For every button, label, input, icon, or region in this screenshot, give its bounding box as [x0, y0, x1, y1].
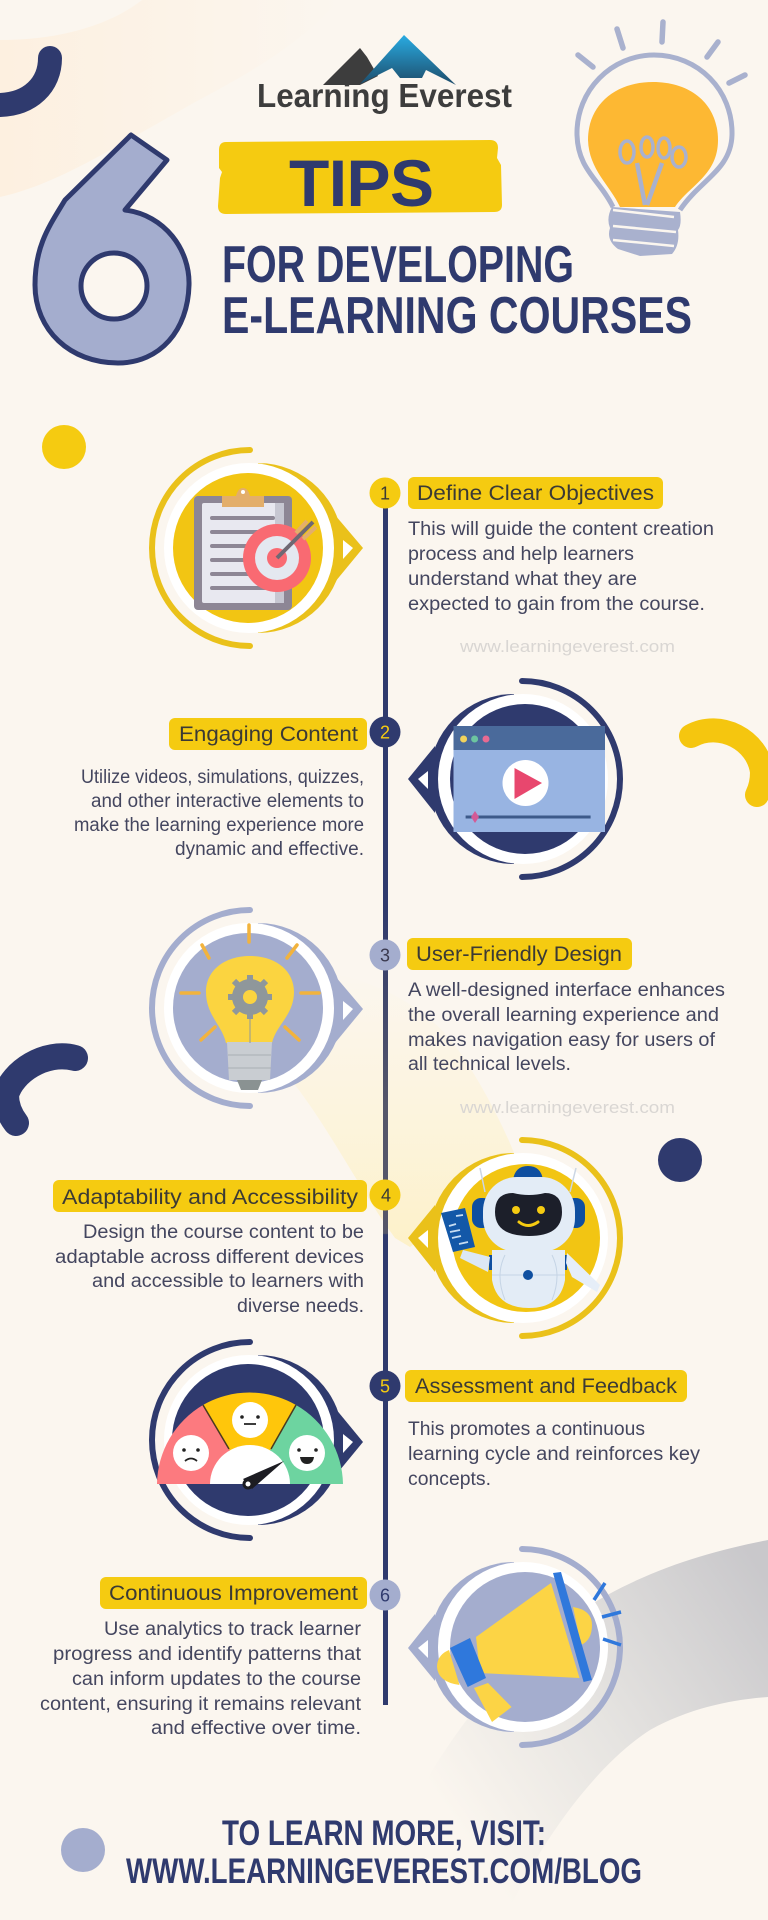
step number 5 — [370, 1370, 400, 1402]
icon: clipboard and target — [152, 450, 363, 646]
body 5: concepts. — [408, 1469, 491, 1490]
body 6: can inform updates to the course — [72, 1669, 361, 1690]
heading 4: Adaptability and Accessibility — [62, 1185, 358, 1209]
heading 1: Define Clear Objectives — [417, 481, 654, 505]
body 5: learning cycle and reinforces key — [408, 1444, 701, 1465]
decorative navy arc left — [6, 1056, 75, 1123]
body 4: adaptable across different devices — [55, 1247, 364, 1268]
title banner: TIPS: TIPS — [289, 146, 434, 220]
icon: feedback gauge — [152, 1342, 363, 1538]
step 1: define clear objectives — [152, 450, 714, 646]
watermark 1: www.learningeverest.com — [459, 638, 675, 656]
icon: robot — [408, 1140, 620, 1336]
heading 6 — [100, 1577, 367, 1609]
body 4: and accessible to learners with — [92, 1271, 364, 1292]
body 6 — [40, 1619, 362, 1739]
heading 2: Engaging Content — [179, 722, 358, 746]
step number 3: 3 — [380, 946, 390, 966]
step number 1 — [370, 478, 400, 508]
step 6: continuous improvement — [40, 1549, 621, 1745]
body 6: progress and identify patterns that — [53, 1644, 362, 1665]
body 4 — [55, 1222, 364, 1317]
step 3: user-friendly design — [152, 910, 725, 1106]
body 2: and other interactive elements to — [91, 791, 364, 812]
step number 4: 4 — [381, 1186, 391, 1206]
step 5: assessment and feedback — [152, 1342, 701, 1538]
heading 4 — [53, 1180, 367, 1212]
body 4: Design the course content to be — [83, 1222, 364, 1243]
body 6: and effective over time. — [151, 1718, 361, 1739]
step 4: adaptability and accessibility — [53, 1140, 620, 1336]
footer call to action: WWW.LEARNINGEVEREST.COM/BLOG — [126, 1852, 642, 1891]
body 3 — [408, 980, 725, 1075]
body 4: diverse needs. — [237, 1296, 364, 1317]
step number 5: 5 — [380, 1376, 390, 1396]
watermark 2: www.learningeverest.com — [459, 1099, 675, 1117]
icon: header light bulb — [577, 22, 745, 256]
step number 2 — [370, 716, 400, 748]
body 5: This promotes a continuous — [408, 1419, 645, 1440]
body 3: the overall learning experience and — [408, 1005, 719, 1026]
body 6: content, ensuring it remains relevant — [40, 1694, 362, 1715]
icon: megaphone — [408, 1549, 621, 1745]
footer call to action — [126, 1814, 642, 1891]
footer call to action: TO LEARN MORE, VISIT: — [222, 1814, 546, 1853]
subtitle: FOR DEVELOPING — [222, 236, 574, 294]
heading 3 — [407, 938, 632, 970]
logo: Learning Everest — [257, 35, 512, 114]
decorative yellow arc right — [691, 730, 762, 795]
step number 6: 6 — [380, 1586, 390, 1606]
step number 4 — [370, 1180, 400, 1210]
step number 3 — [370, 940, 400, 970]
body 2: Utilize videos, simulations, quizzes, — [81, 767, 364, 788]
body 1: understand what they are — [408, 569, 637, 590]
icon: video player — [408, 681, 620, 877]
title banner: TIPS — [218, 140, 502, 220]
step number 1: 1 — [380, 484, 390, 504]
body 3: A well-designed interface enhances — [408, 980, 725, 1001]
body 3: all technical levels. — [408, 1054, 571, 1075]
decorative peach band top left — [0, 0, 340, 197]
body 3: makes navigation easy for users of — [408, 1030, 716, 1051]
heading 5 — [405, 1370, 687, 1402]
heading 5: Assessment and Feedback — [415, 1374, 677, 1398]
body 1 — [408, 519, 714, 615]
heading 3: User-Friendly Design — [416, 942, 622, 966]
body 1: This will guide the content creation — [408, 519, 714, 540]
decorative periwinkle dot — [61, 1828, 105, 1872]
body 5 — [408, 1419, 701, 1490]
timeline — [383, 500, 388, 1705]
decorative navy dot — [658, 1138, 702, 1182]
step number 2: 2 — [380, 722, 390, 742]
body 2: dynamic and effective. — [175, 839, 364, 860]
heading 2 — [169, 718, 367, 750]
heading 1 — [408, 477, 663, 509]
decorative yellow dot — [42, 425, 86, 469]
logo: Learning Everest: Learning Everest — [257, 77, 512, 114]
decorative pale yellow band — [295, 975, 520, 1247]
heading 6: Continuous Improvement — [109, 1581, 358, 1605]
body 2: make the learning experience more — [74, 815, 364, 836]
subtitle — [222, 236, 692, 345]
step number 6 — [370, 1580, 400, 1610]
icon: bulb with gear — [152, 910, 363, 1106]
decorative grey band bottom right — [367, 1540, 768, 1920]
body 6: Use analytics to track learner — [104, 1619, 362, 1640]
body 1: process and help learners — [408, 544, 634, 565]
big number 6 — [35, 135, 189, 363]
step 2: engaging content — [74, 681, 620, 877]
decorative navy arc top left — [0, 58, 50, 105]
body 2 — [74, 767, 364, 860]
body 1: expected to gain from the course. — [408, 594, 705, 615]
